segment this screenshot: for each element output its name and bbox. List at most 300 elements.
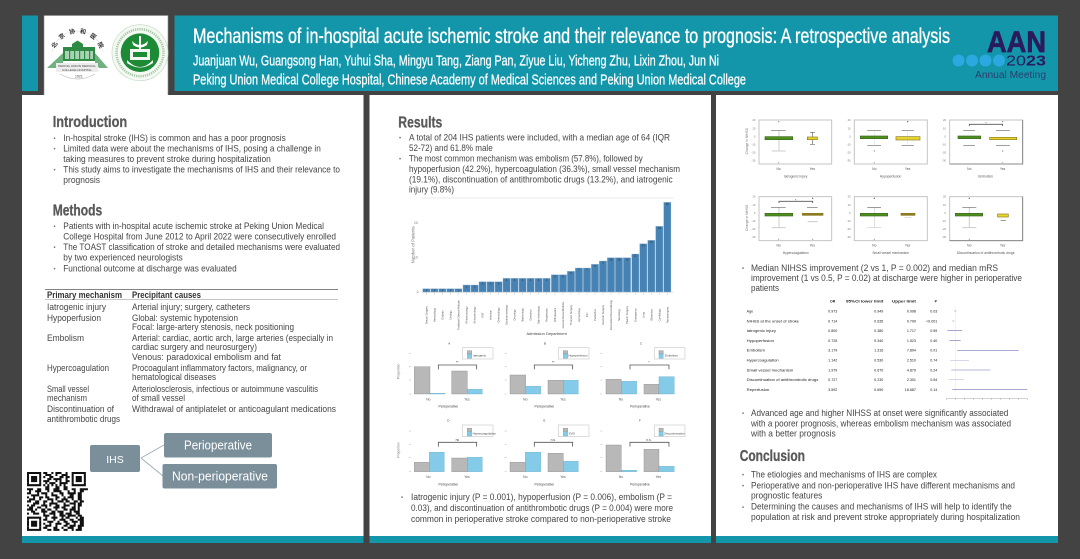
bar charts: perioperative proportions, six panels: F: [639, 418, 641, 422]
chart D: hypercoagulation: Yes: [464, 475, 470, 479]
box plots: change in NIHSS by mechanism: 10: [752, 126, 756, 130]
text: prognosis associations: with a poorer prognosis, whereas embolism mechanism was associated: [750, 418, 1011, 429]
box plot: hypoperfusion: Hypoperfusion: [880, 174, 902, 178]
bar chart: patients by admission department: Dialysis: [440, 310, 444, 320]
forest table: 0.800: [828, 329, 837, 333]
bar chart: patients by admission department: Geriatrics: [529, 309, 533, 321]
chart F: discontinuation of antithrombotic drugs: Yes: [656, 475, 661, 479]
forest table: 0.01: [930, 349, 937, 353]
text: methods bullets: Patients with in-hospital acute ischemic stroke at Peking Union Medical: [63, 221, 324, 232]
box plot: hypercoagulation: Hypercoagulation: [783, 251, 809, 255]
chart A: iatrogenic injury: [414, 348, 493, 409]
forest table: 0.799: [907, 319, 916, 323]
forest table: 0.670: [874, 368, 883, 372]
text: introduction bullets: taking measures to prevent stroke during hospitalization: [63, 154, 271, 165]
icon: hospital emblem: PEKING UNION MEDICAL: [58, 64, 96, 68]
bar chart: patients by admission department: 4: [522, 280, 524, 282]
box plot: iatrogenic injury: [759, 120, 832, 178]
bar chart: patients by admission department: Vascular Surgery: [601, 304, 605, 325]
box plots: change in NIHSS by mechanism: 10: [943, 126, 946, 130]
diagram: IHS classification: Perioperative: [184, 438, 252, 452]
box plots: change in NIHSS by mechanism: -20: [847, 150, 851, 154]
text: perioperative comparison: common in perioperative stroke compared to non-perioperative stroke: [411, 514, 671, 525]
bar chart: patients by admission department: 1: [450, 290, 452, 292]
icon: college emblem: [112, 25, 168, 81]
chart D: hypercoagulation: Perioperative: [439, 482, 458, 486]
text: median improvement: Median NIHSS improvement (2 vs 1, P = 0.002) and median mRS: [751, 263, 998, 274]
text: median improvement: improvement (1 vs 0.5, P = 0.02) at discharge were higher in perioperative: [751, 273, 1022, 284]
forest table: Iatrogenic injury: [747, 329, 776, 333]
bar chart: patients by admission department: 20: [414, 221, 418, 225]
forest table: Reperfusion: [747, 388, 769, 392]
chart E: small vessel mechanism: SVD: [569, 431, 576, 435]
box plots: change in NIHSS by mechanism: 20: [752, 195, 756, 199]
forest table: 2.301: [907, 378, 916, 382]
forest table: NIHSS at the onset of stroke: [747, 319, 799, 323]
box plot: embolism: Embolism: [978, 174, 993, 178]
box plot: embolism: *: [985, 122, 987, 126]
text: conclusion bullets: The etiologies and mechanisms of IHS are complex: [751, 469, 937, 480]
icon: hospital emblem: 医: [88, 32, 97, 41]
forest table: 0.14: [930, 388, 937, 392]
text: methods bullets: Functional outcome at discharge was evaluated: [63, 263, 237, 274]
table: mechanisms and precipitant causes: Focal: large-artery stenosis, neck positioning: [132, 322, 294, 333]
box plot: hypoperfusion: No: [872, 167, 877, 171]
table: mechanisms and precipitant causes: Arterial: cardiac, aortic arch, large arteries (especially in: [132, 333, 333, 344]
bar chart: patients by admission department: 10: [618, 259, 621, 261]
box plots: change in NIHSS by mechanism: Change in NIHSS: [745, 204, 749, 231]
box plots: change in NIHSS by mechanism: 0: [849, 211, 851, 215]
forest table: 0.530: [874, 359, 883, 363]
bar charts: perioperative proportions, six panels: Proportion: [397, 442, 401, 458]
text: introduction bullets: •: [54, 168, 56, 174]
chart A: iatrogenic injury: Yes: [464, 397, 470, 401]
forest table: 0.690: [874, 388, 883, 392]
text: median improvement: patients: [751, 283, 779, 294]
text: results bullets: 52-72) and 61.8% male: [409, 143, 493, 154]
box plots: change in NIHSS by mechanism: -10: [942, 142, 946, 146]
bar chart: patients by admission department: Thoracic Surgery: [569, 304, 573, 325]
bar chart: patients by admission department: 4: [506, 280, 508, 282]
bar chart: patients by admission department: 6: [570, 273, 572, 275]
box plots: change in NIHSS by mechanism: 10: [943, 203, 946, 207]
forest table: 0.998: [907, 309, 916, 313]
forest table: 18.687: [905, 388, 916, 392]
chart F: discontinuation of antithrombotic drugs: [606, 425, 685, 486]
panel: results continued and conclusion: [716, 95, 1058, 543]
forest table: 0.74: [930, 359, 937, 363]
icon: hospital emblem: 1921: [75, 74, 83, 78]
table: mechanisms and precipitant causes: Iatrogenic injury: [47, 302, 106, 313]
forest table: <0.001: [926, 319, 937, 323]
forest table: 0.340: [874, 339, 883, 343]
box plots: change in NIHSS by mechanism: -30: [847, 158, 851, 162]
text: introduction bullets: •: [54, 136, 56, 142]
text: prognosis associations: Advanced age and higher NIHSS at onset were significantly associated: [751, 408, 1008, 419]
text: methods bullets: The TOAST classification of stroke and detailed mechanisms were evaluated: [63, 242, 340, 253]
text: results bullets: [399, 133, 680, 196]
box plots: change in NIHSS by mechanism: -30: [942, 158, 946, 162]
authors: Juanjuan Wu, Guangsong Han, Yuhui Sha, Mingyu Tang, Ziang Pan, Ziyue Liu, Yicheng Zhu, Lixin Zhou, Jun Ni: [193, 52, 719, 70]
bar chart: patients by admission department: B: [544, 341, 546, 345]
bar chart: patients by admission department: 10: [610, 259, 613, 261]
table: mechanisms and precipitant causes: cardiac surgery and neurosurgery): [132, 342, 257, 353]
box plots: change in NIHSS by mechanism: [745, 118, 1023, 255]
table: mechanisms and precipitant causes: Primary mechanism: [47, 290, 122, 301]
chart B: hypoperfusion: Perioperative: [535, 405, 554, 409]
icon: hospital emblem: 院: [96, 41, 105, 50]
box plot: discontinuation of antithrombotic drugs: No: [967, 244, 972, 248]
chart C: embolism: Yes: [656, 397, 661, 401]
forest table: P: [935, 299, 938, 303]
box plots: change in NIHSS by mechanism: -20: [751, 227, 756, 231]
affiliations: Peking Union Medical College Hospital, Chinese Academy of Medical Sciences and Peking Union Medical College: [193, 72, 746, 88]
box plot: hypercoagulation: No: [777, 244, 781, 248]
text: conclusion bullets: [742, 469, 1020, 523]
text: results bullets: injury (9.8%): [409, 185, 454, 196]
box plot: small vessel mechanism: [854, 197, 927, 255]
chart D: hypercoagulation: No: [426, 475, 431, 479]
bar chart: patients by admission department: 10: [414, 256, 418, 260]
box plot: hypercoagulation: Yes: [810, 244, 815, 248]
chart F: discontinuation of antithrombotic drugs: Perioperative: [630, 482, 650, 486]
icon: hospital emblem: 北: [50, 41, 59, 50]
icon: hospital emblem: 协: [68, 27, 76, 36]
forest table: Upper limit: [892, 299, 917, 303]
forest table: Discontinuation of antithrombotic drugs: [747, 378, 819, 382]
forest table: 1.523: [907, 339, 916, 343]
table: mechanisms and precipitant causes: hematological diseases: [132, 372, 216, 383]
bar chart: patients by admission department: 3: [498, 283, 500, 285]
bar charts: perioperative proportions, six panels: D: [447, 418, 450, 422]
forest table: 0.380: [874, 329, 883, 333]
chart C: embolism: *: [648, 361, 650, 365]
chart E: small vessel mechanism: No: [523, 475, 528, 479]
box plot: discontinuation of antithrombotic drugs: [950, 197, 1023, 255]
QR code: [27, 473, 88, 530]
box plot: hypoperfusion: Yes: [905, 167, 911, 171]
forest table: 0.230: [874, 378, 883, 382]
box plot: small vessel mechanism: No: [872, 244, 877, 248]
bar chart: patients by admission department: Hematology: [432, 307, 436, 322]
chart F: discontinuation of antithrombotic drugs: No: [619, 475, 623, 479]
chart B: hypoperfusion: Yes: [560, 397, 566, 401]
chart C: embolism: [606, 348, 685, 409]
bar chart: patients by admission department: 2: [466, 287, 468, 289]
bar chart: patients by admission department: 10: [626, 259, 629, 261]
bar chart: patients by admission department: Infection: [489, 309, 493, 320]
bar chart: patients by admission department: Oncology: [513, 309, 517, 321]
bar chart: patients by admission department: 4: [530, 280, 532, 282]
box plot: small vessel mechanism: Yes: [905, 244, 911, 248]
text: results bullets: A total of 204 IHS patients were included, with a median age of 64 (IQR: [409, 133, 670, 144]
table: mechanisms and precipitant causes: mechanism: [47, 393, 87, 404]
bar chart: patients by admission department: ENT: [481, 312, 485, 318]
icon: hospital emblem: COLLEGE HOSPITAL: [62, 68, 92, 72]
text: conclusion bullets: Perioperative and non-perioperative IHS have different mechanisms and: [751, 480, 1015, 491]
bar chart: patients by admission department: 1: [458, 290, 460, 292]
bar chart: patients by admission department: 19: [658, 228, 661, 230]
bar chart: patients by admission department: 3: [482, 283, 484, 285]
text: perioperative comparison: [401, 492, 673, 525]
forest table: 1.717: [907, 329, 916, 333]
box plots: change in NIHSS by mechanism: 20: [848, 118, 851, 122]
bar chart: patients by admission department: Admission Department: [526, 331, 568, 336]
chart C: embolism: Perioperative: [630, 405, 650, 409]
chart A: iatrogenic injury: No: [426, 397, 431, 401]
box plots: change in NIHSS by mechanism: -20: [847, 227, 851, 231]
bar chart: patients by admission department: Orthopedics: [553, 307, 557, 322]
text: results bullets: (19.1%), discontinuation of antithrombotic drugs (13.2%), and iatrogenic: [409, 175, 673, 186]
chart B: hypoperfusion: Hypoperfusion: [568, 354, 588, 358]
chart F: discontinuation of antithrombotic drugs: Discontinuation: [664, 431, 685, 435]
forest table: 0.727: [828, 378, 837, 382]
forest table: 1.979: [828, 368, 837, 372]
box plot: small vessel mechanism: Small vessel mechanism: [872, 251, 909, 255]
bar chart: patients by admission department: A: [448, 341, 450, 345]
bar chart: patients by admission department: 15: [650, 242, 653, 244]
bar chart: patients by admission department: C: [640, 341, 643, 345]
forest table: 2.510: [907, 359, 916, 363]
box plot: embolism: [950, 120, 1023, 178]
box plots: change in NIHSS by mechanism: -10: [751, 219, 756, 223]
text: introduction bullets: •: [54, 147, 56, 153]
bar chart: patients by admission department: Lung: [641, 312, 645, 318]
logo: AAN 2023 annual meeting: [952, 26, 1046, 81]
bar chart: patients by admission department: 5: [562, 276, 564, 278]
text: introduction bullets: [54, 133, 340, 186]
table: mechanisms and precipitant causes: Hypercoagulation: [47, 363, 109, 374]
bar chart: patients by admission department: Breast Surgery: [424, 305, 428, 324]
box plots: change in NIHSS by mechanism: 20: [943, 118, 946, 122]
heading: methods: Methods: [53, 203, 102, 220]
bar chart: patients by admission department: Emergency: [633, 308, 637, 322]
box plots: change in NIHSS by mechanism: -30: [942, 235, 946, 239]
bar chart: patients by admission department: Neurosurgery: [665, 306, 669, 323]
box plots: change in NIHSS by mechanism: 0: [754, 211, 756, 215]
box plots: change in NIHSS by mechanism: 0: [944, 211, 946, 215]
text: introduction bullets: prognosis: [63, 175, 100, 186]
chart E: small vessel mechanism: Yes: [560, 475, 566, 479]
chart C: embolism: No: [619, 397, 623, 401]
bar chart: patients by admission department: 4: [514, 280, 516, 282]
box plots: change in NIHSS by mechanism: 10: [752, 203, 756, 207]
bar chart: patients by admission department: 7: [586, 270, 588, 272]
bar chart: patients by admission department: 1: [426, 290, 428, 292]
chart A: iatrogenic injury: **: [456, 361, 459, 365]
bar chart: patients by admission department: Obstetrics: [649, 308, 653, 321]
text: conclusion bullets: •: [742, 484, 744, 490]
forest table: [747, 299, 938, 392]
table: mechanisms and precipitant causes: Procoagulant inflammatory factors, malignancy, or: [132, 363, 307, 374]
icon: hospital emblem: 京: [57, 31, 67, 41]
table: mechanisms and precipitant causes: antithrombotic drugs: [47, 414, 120, 425]
text: introduction bullets: This study aims to investigate the mechanisms of IHS and their relevance to: [63, 165, 340, 176]
forest table: Small vessel mechanism: [747, 368, 793, 372]
box plots: change in NIHSS by mechanism: 20: [752, 118, 756, 122]
text: methods bullets: •: [54, 224, 56, 230]
bar chart: patients by admission department: Respiratory: [545, 308, 549, 322]
forest table: Hypoperfusion: [747, 339, 774, 343]
table: mechanisms and precipitant causes: Embolism: [47, 333, 84, 344]
header accent bar: [22, 16, 38, 91]
box plot: discontinuation of antithrombotic drugs: Yes: [1000, 244, 1006, 248]
chart D: hypercoagulation: [414, 425, 496, 486]
box plots: change in NIHSS by mechanism: 10: [848, 126, 851, 130]
bar chart: patients by admission department: Cardiology: [657, 308, 661, 321]
box plots: change in NIHSS by mechanism: -30: [751, 235, 756, 239]
chart A: iatrogenic injury: Iatrogenic: [473, 354, 487, 358]
table: mechanisms and precipitant causes: [45, 289, 338, 425]
icon: hospital emblem: 和: [79, 27, 87, 36]
box plots: change in NIHSS by mechanism: 20: [848, 195, 851, 199]
chart B: hypoperfusion: No: [523, 397, 528, 401]
text: conclusion bullets: prognostic features: [751, 491, 823, 502]
bar charts: perioperative proportions, six panels: Proportion: [397, 363, 401, 379]
logo: AAN 2023 annual meeting: 20 23: [1006, 54, 1046, 70]
box plots: change in NIHSS by mechanism: -10: [942, 219, 946, 223]
bar chart: patients by admission department: Gastroenterology: [505, 304, 509, 325]
table: mechanisms and precipitant causes: Global: systemic hypotension: [132, 313, 238, 324]
box plots: change in NIHSS by mechanism: -30: [847, 235, 851, 239]
icon: hospital emblem: [47, 27, 108, 79]
bar chart: patients by admission department: Number of Patients: [411, 226, 416, 263]
forest plot: multivariable prognosis: [747, 299, 1027, 400]
box plot: hypercoagulation: *: [795, 199, 797, 203]
text: results bullets: •: [399, 136, 401, 142]
bar chart: patients by admission department: 1: [442, 290, 444, 292]
text: median improvement: [742, 263, 1022, 294]
forest table: Hypercoagulation: [747, 359, 779, 363]
chart E: small vessel mechanism: Perioperative: [535, 482, 554, 486]
chart E: small vessel mechanism: [510, 425, 589, 486]
logos panel: [44, 16, 168, 96]
forest table: 1.142: [828, 359, 837, 363]
text: prognosis associations: [742, 408, 1011, 440]
text: median improvement: •: [742, 266, 744, 272]
diagram: IHS classification: Non-perioperative: [172, 470, 268, 484]
forest table: 95%CI lower limit: [846, 299, 884, 303]
table: mechanisms and precipitant causes: Discontinuation of: [47, 404, 114, 415]
bar chart: patients by admission department: 2: [474, 287, 476, 289]
text: prognosis associations: •: [742, 412, 744, 418]
heading: introduction: Introduction: [53, 114, 127, 131]
bar chart: patients by admission department: 7: [578, 270, 580, 272]
box plots: change in NIHSS by mechanism: -30: [751, 158, 756, 162]
forest table: 4.879: [907, 368, 916, 372]
text: perioperative comparison: Iatrogenic injury (P = 0.001), hypoperfusion (P = 0.006), embolism (P =: [411, 492, 672, 503]
text: introduction bullets: In-hospital stroke (IHS) is common and has a poor prognosis: [63, 133, 286, 144]
bar chart: patients by admission department: 4: [546, 280, 548, 282]
forest table: 0.40: [930, 339, 937, 343]
text: methods bullets: by two experienced neurologists: [63, 253, 183, 264]
box plot: hypoperfusion: [854, 120, 927, 178]
bar chart: patients by admission department: 9: [602, 263, 604, 265]
box plot: embolism: No: [967, 167, 972, 171]
box plot: iatrogenic injury: Iatrogenic injury: [784, 174, 808, 178]
text: conclusion bullets: Determining the causes and mechanisms of IHS will help to identify the: [751, 502, 1012, 513]
text: conclusion bullets: •: [742, 473, 744, 479]
chart B: hypoperfusion: **: [552, 361, 555, 365]
box plot: embolism: Yes: [1000, 167, 1006, 171]
forest table: 0.949: [874, 309, 883, 313]
box plots: change in NIHSS by mechanism: -20: [942, 227, 946, 231]
table: mechanisms and precipitant causes: Withdrawal of antiplatelet or anticoagulant medications: [132, 404, 336, 415]
box plots: change in NIHSS by mechanism: 10: [848, 203, 851, 207]
bar chart: patients by admission department: Rheumatology: [465, 306, 469, 324]
text: conclusion bullets: population at risk and prevent stroke appropriately during hospitalization: [751, 512, 1020, 523]
bar chart: patients by admission department: Endocrinology: [473, 306, 477, 323]
bar chart: patients by admission department: Gynecology: [577, 307, 581, 322]
table: mechanisms and precipitant causes: Arteriolosclerosis, infectious or autoimmune vasculitis: [132, 384, 318, 395]
forest table: 3.592: [828, 388, 837, 392]
forest table: 0.973: [828, 309, 837, 313]
bar charts: perioperative proportions, six panels: [397, 348, 685, 486]
bar chart: patients by admission department: Traditional Chinese Medicine: [457, 299, 460, 330]
bar chart: patients by admission department: [411, 198, 673, 345]
forest table: 1.316: [874, 349, 883, 353]
chart E: small vessel mechanism: n.s.: [551, 438, 556, 442]
table: mechanisms and precipitant causes: of small vessel: [132, 393, 185, 404]
forest table: Embolism: [747, 349, 765, 353]
forest table: Age: [747, 309, 753, 313]
panel: results: [370, 95, 711, 543]
diagram: IHS classification: [90, 433, 277, 488]
box plots: change in NIHSS by mechanism: 0: [754, 134, 756, 138]
bar chart: patients by admission department: Pediatrics: [593, 308, 597, 321]
text: prognosis associations: with a better prognosis: [750, 429, 836, 440]
table: mechanisms and precipitant causes: Small vessel: [47, 384, 89, 395]
chart F: discontinuation of antithrombotic drugs: n.s.: [646, 438, 652, 442]
text: methods bullets: College Hospital from June 2012 to April 2022 were consecutively enrolled: [63, 232, 336, 243]
bar chart: patients by admission department: 0: [417, 290, 419, 294]
box plot: iatrogenic injury: No: [777, 167, 781, 171]
table: mechanisms and precipitant causes: Arterial injury; surgery, catheters: [132, 302, 250, 313]
panel: introduction, methods, table, diagram: [22, 95, 364, 543]
forest table: 7.894: [907, 349, 916, 353]
forest table: 0.54: [930, 378, 937, 382]
box plots: change in NIHSS by mechanism: -10: [847, 219, 851, 223]
forest table: 0.59: [930, 329, 937, 333]
text: conclusion bullets: •: [742, 506, 744, 512]
box plot: iatrogenic injury: Yes: [810, 167, 815, 171]
box plots: change in NIHSS by mechanism: Change in NIHSS: [745, 127, 749, 154]
heading: results: Results: [398, 115, 442, 132]
chart B: hypoperfusion: [510, 348, 589, 409]
box plots: change in NIHSS by mechanism: 0: [944, 134, 946, 138]
forest table: 0.635: [874, 319, 883, 323]
bar chart: patients by admission department: 8: [594, 266, 596, 268]
text: methods bullets: [54, 221, 340, 274]
bar chart: patients by admission department: Urology: [448, 310, 452, 320]
box plot: hypercoagulation: [759, 197, 832, 255]
table: mechanisms and precipitant causes: Precipitant causes: [132, 290, 201, 301]
bar chart: patients by admission department: Nephrology: [521, 308, 525, 322]
box plot: discontinuation of antithrombotic drugs: Discontinuation of antithrombotic drugs: [957, 251, 1015, 255]
text: perioperative comparison: 0.03), and discontinuation of antithrombotic drugs (P = 0.004) were more: [411, 503, 673, 514]
bar chart: patients by admission department: ICU: [585, 313, 589, 317]
bar chart: patients by admission department: Interventional Neuroradiology: [610, 299, 613, 330]
text: results bullets: •: [399, 157, 401, 163]
chart C: embolism: Embolism: [665, 354, 679, 358]
chart D: hypercoagulation: Hypercoagulation: [473, 431, 496, 435]
bar chart: patients by admission department: Ophthalmology: [537, 305, 541, 324]
logo: AAN 2023 annual meeting: AAN: [987, 26, 1046, 59]
bar chart: patients by admission department: Dermatology: [497, 307, 501, 323]
heading: conclusion: Conclusion: [740, 448, 805, 465]
text: perioperative comparison: •: [401, 496, 403, 502]
forest intervals: [947, 307, 1027, 400]
